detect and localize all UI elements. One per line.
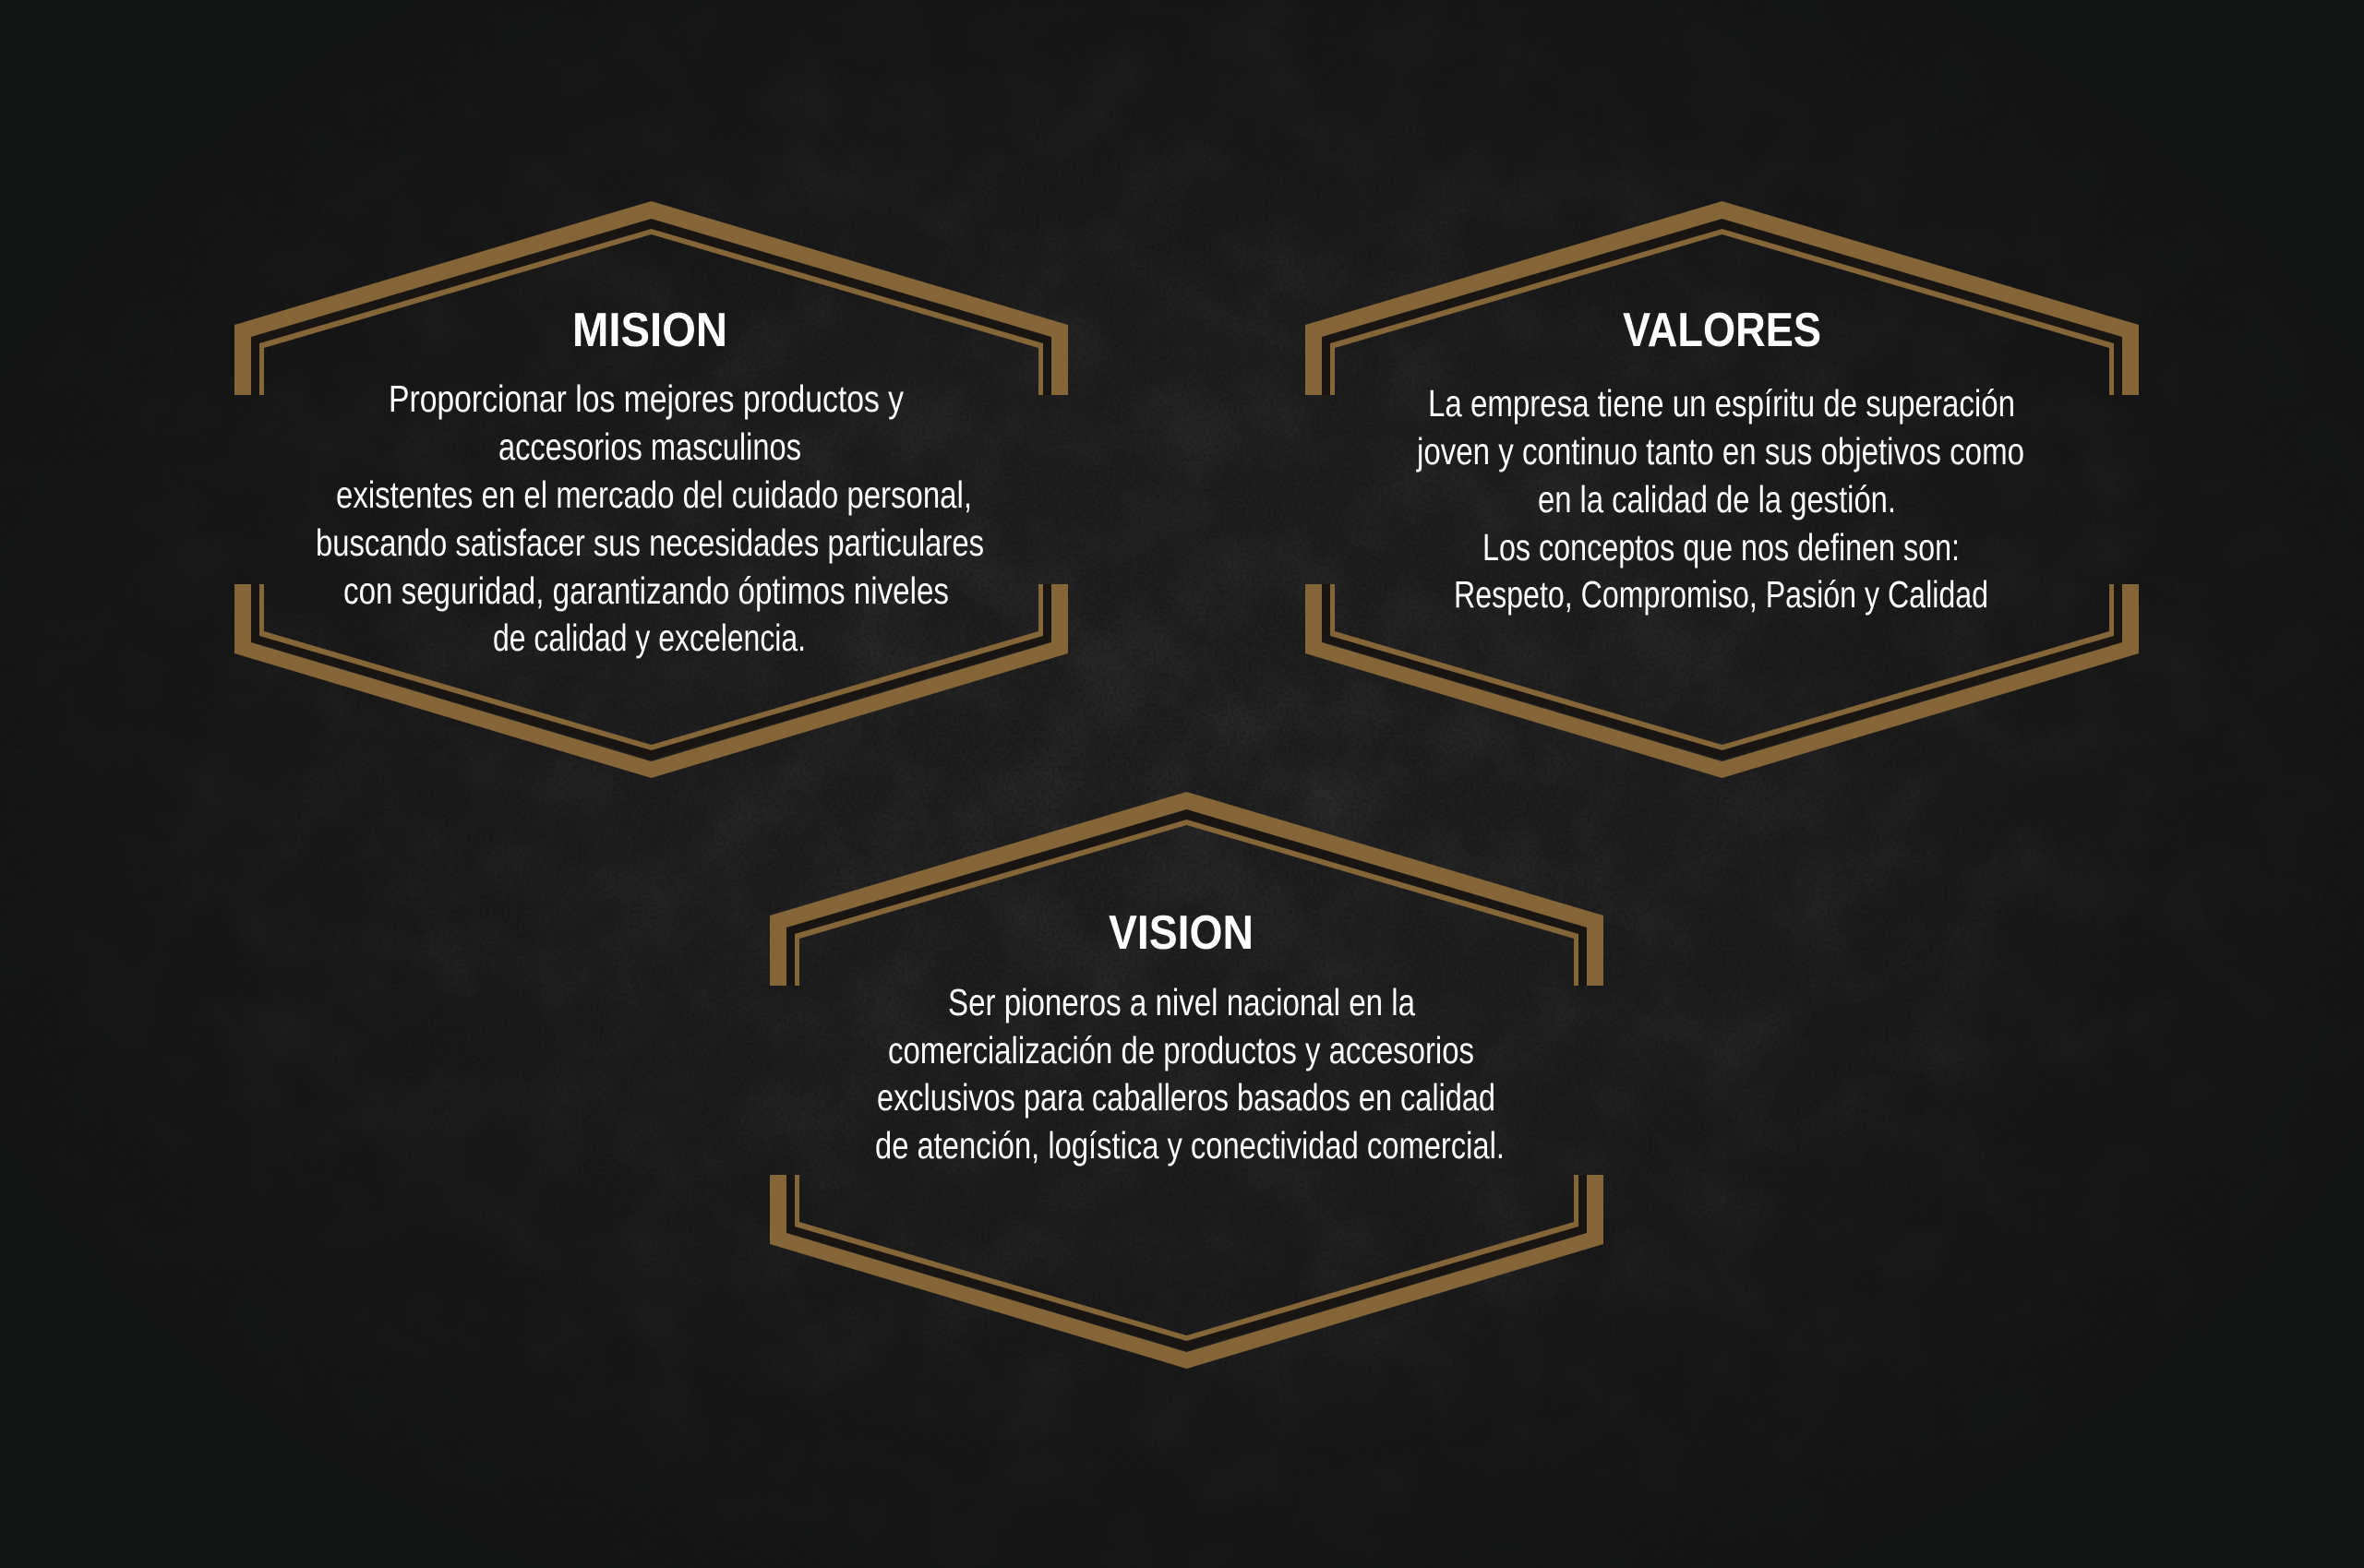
text block: mision: buscando satisfacer sus necesidades particulares (316, 521, 984, 564)
hexagon frame: valores (1305, 201, 2139, 778)
text block: vision: exclusivos para caballeros basados en calidad (877, 1076, 1495, 1119)
background: dark textured surface (192, 33, 2143, 1438)
text block: valores: en la calidad de la gestión. (1538, 478, 1896, 521)
heading: VISION: VISION (1109, 906, 1254, 960)
hexagon frame: vision (770, 792, 1603, 1369)
text block: vision (875, 981, 1505, 1167)
panel: vision (770, 792, 1603, 1369)
panel: mision (234, 201, 1068, 778)
text block: mision: existentes en el mercado del cuidado personal, (336, 473, 972, 516)
text block: mision: de calidad y excelencia. (493, 616, 806, 659)
text block: valores: Los conceptos que nos definen son: (1482, 526, 1960, 569)
text block: valores: Respeto, Compromiso, Pasión y Calidad (1454, 573, 1988, 616)
text block: mision: accesorios masculinos (498, 425, 801, 468)
panel: valores (1305, 201, 2139, 778)
heading: MISION: MISION (572, 304, 727, 357)
hexagon frame: mision (234, 201, 1068, 778)
text block: valores: La empresa tiene un espíritu de superación (1428, 382, 2015, 425)
text block: vision: Ser pioneros a nivel nacional en la (948, 981, 1415, 1023)
heading: VALORES: VALORES (1623, 304, 1821, 357)
text block: mision: Proporcionar los mejores productos y (389, 377, 904, 420)
text block: vision: de atención, logística y conectividad comercial. (875, 1124, 1505, 1167)
text block: vision: comercialización de productos y accesorios (888, 1029, 1474, 1071)
text block: mision (316, 377, 984, 659)
text block: mision: con seguridad, garantizando óptimos niveles (343, 569, 949, 612)
text block: valores (1416, 382, 2024, 616)
text block: valores: joven y continuo tanto en sus objetivos como (1416, 430, 2024, 473)
